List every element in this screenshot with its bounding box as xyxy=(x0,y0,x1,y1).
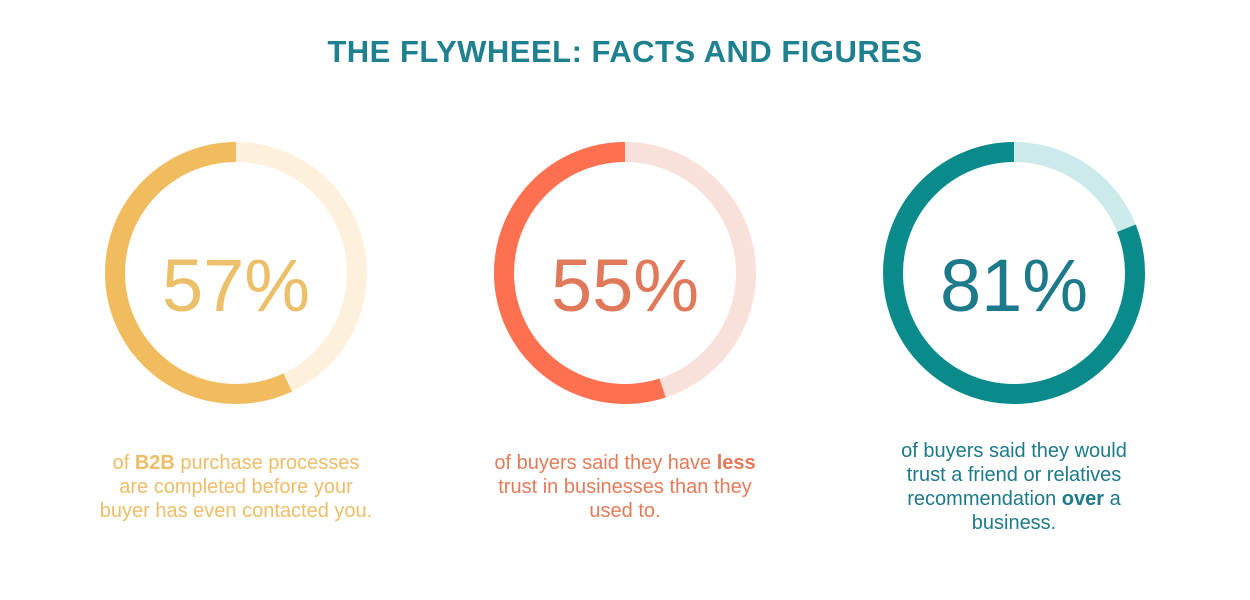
caption 1: buyer has even contacted you. xyxy=(100,500,372,522)
caption 2: trust in businesses than they xyxy=(498,476,752,498)
caption 3: trust a friend or relatives xyxy=(907,464,1121,486)
donut: 55% xyxy=(494,142,756,404)
caption 2: of buyers said they have less xyxy=(494,452,756,474)
caption 1 xyxy=(100,452,372,522)
number 57%: 57% xyxy=(162,244,310,327)
caption 3: recommendation over a xyxy=(907,488,1121,510)
caption 2: used to. xyxy=(589,500,661,522)
caption 2 xyxy=(494,452,756,522)
caption 1: are completed before your xyxy=(119,476,353,498)
donut: 81% xyxy=(883,142,1145,404)
title: THE FLYWHEEL: FACTS AND FIGURES xyxy=(327,34,923,69)
caption 3 xyxy=(901,440,1127,534)
donut: 57% xyxy=(105,142,367,404)
caption 3: business. xyxy=(972,512,1056,534)
caption 3: of buyers said they would xyxy=(901,440,1127,462)
number 81%: 81% xyxy=(940,244,1088,327)
number 55%: 55% xyxy=(551,244,699,327)
caption 1: of B2B purchase processes xyxy=(113,452,359,474)
